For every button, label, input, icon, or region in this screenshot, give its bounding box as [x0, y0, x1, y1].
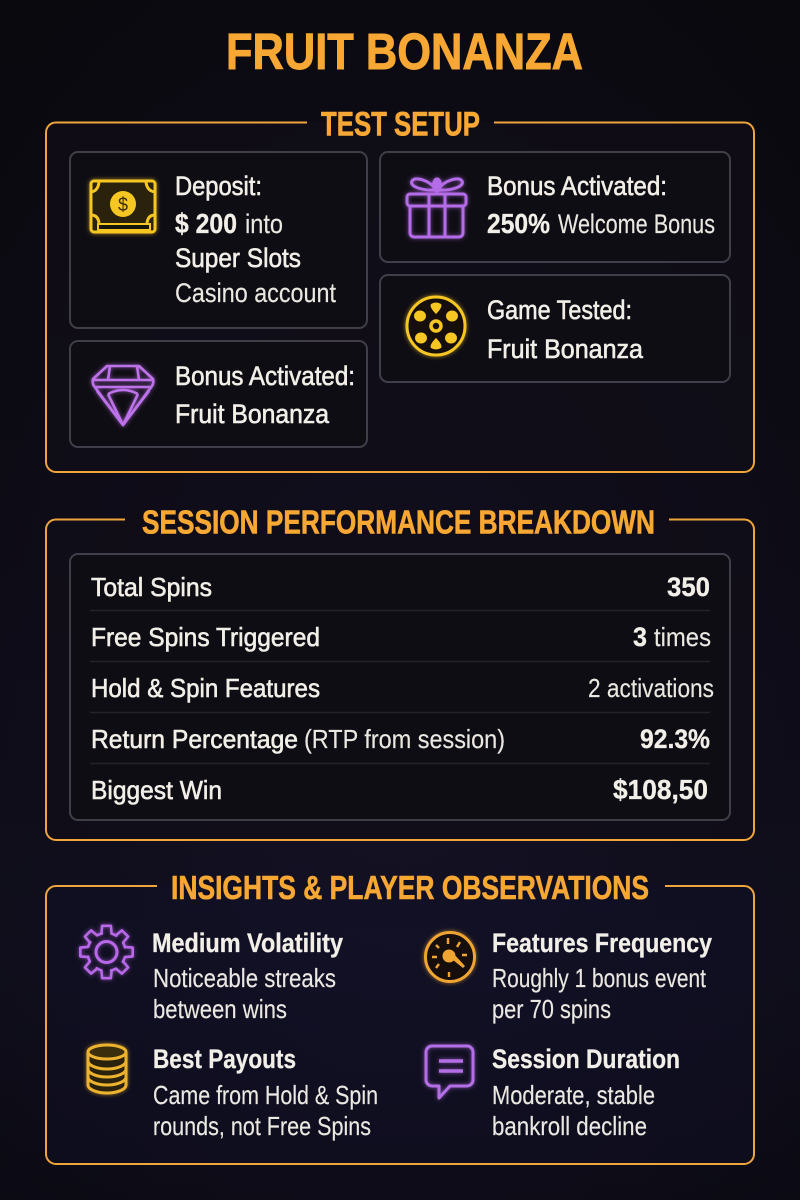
text: features frequency [492, 928, 712, 1024]
icon: speech bubble [426, 1046, 473, 1098]
text: session duration: bankroll decline [492, 1111, 647, 1141]
text: welcome bonus: Welcome Bonus [558, 209, 715, 239]
icon: banknote [91, 181, 155, 232]
row: hold and spin features: Hold & Spin Features [91, 673, 320, 703]
text: deposit [175, 171, 336, 308]
text: welcome bonus [487, 171, 715, 239]
icon: banknote: $ [118, 195, 128, 216]
card: game tested [380, 275, 730, 382]
text: medium volatility: Noticeable streaks [153, 963, 336, 993]
row: biggest win [91, 774, 708, 805]
row: return percentage: (RTP from session) [304, 724, 505, 754]
item: medium volatility [80, 926, 343, 1024]
text: bonus activated: Bonus Activated: [175, 361, 355, 391]
table: session stats [70, 554, 730, 820]
text: session duration: Session Duration [492, 1044, 680, 1074]
text: game tested: Fruit Bonanza [487, 334, 644, 364]
item: best payouts [88, 1044, 378, 1141]
row: biggest win: $108,50 [613, 774, 708, 805]
text: features frequency: Features Frequency [492, 928, 712, 958]
icon: coin stack [88, 1045, 126, 1093]
text: session duration [492, 1044, 680, 1141]
text: deposit: Deposit: [175, 171, 262, 201]
card: welcome bonus [380, 152, 730, 262]
text: best payouts: Came from Hold & Spin [153, 1080, 378, 1110]
text: features frequency: Roughly 1 bonus event [492, 963, 707, 993]
heading: session performance breakdown: SESSION PERFORMANCE BREAKDOWN [142, 504, 655, 540]
icon: wheel [407, 297, 465, 355]
text: best payouts [153, 1044, 378, 1141]
item: features frequency [426, 928, 712, 1024]
title: FRUIT BONANZA [226, 23, 583, 80]
card: bonus activated, fruit bonanza [70, 341, 367, 447]
card: deposit [70, 152, 367, 328]
text: deposit: $ 200 [175, 208, 237, 239]
panel: session performance breakdown [46, 504, 754, 840]
row: total spins: 350 [667, 572, 710, 602]
row: free spins triggered: Free Spins Triggered [91, 622, 320, 652]
row: hold and spin features [91, 673, 714, 703]
row: free spins triggered: times [654, 622, 711, 652]
heading: insights and player observations: INSIGHTS & PLAYER OBSERVATIONS [171, 869, 649, 906]
text: medium volatility: Medium Volatility [152, 928, 343, 958]
icon: gauge [426, 932, 474, 982]
panel: test setup [46, 106, 754, 472]
row: hold and spin features: 2 activations [588, 673, 714, 703]
icon: diamond [93, 366, 153, 425]
text: best payouts: Best Payouts [153, 1044, 296, 1074]
text: game tested: Game Tested: [487, 295, 632, 325]
text: bonus activated: Fruit Bonanza [175, 399, 330, 429]
text: bonus activated [175, 361, 355, 429]
text: features frequency: per 70 spins [492, 994, 611, 1024]
panel: insights and player observations [46, 869, 754, 1164]
text: medium volatility: between wins [153, 994, 287, 1024]
text: deposit: into [245, 209, 283, 239]
text: best payouts: rounds, not Free Spins [153, 1111, 371, 1141]
row: total spins: Total Spins [91, 572, 212, 602]
text: deposit: Casino account [175, 278, 336, 308]
row: return percentage [91, 724, 710, 754]
row: return percentage: 92.3% [640, 724, 710, 754]
text: welcome bonus: Bonus Activated: [487, 171, 667, 201]
row: return percentage: Return Percentage [91, 724, 298, 754]
icon: gear [80, 926, 133, 978]
text: deposit: Super Slots [175, 243, 301, 273]
icon: gift [407, 179, 466, 237]
text: game tested [487, 295, 644, 364]
text: medium volatility [152, 928, 343, 1024]
heading: test setup: TEST SETUP [321, 106, 480, 144]
text: welcome bonus: 250% [487, 208, 550, 239]
row: biggest win: Biggest Win [91, 775, 222, 805]
text: session duration: Moderate, stable [492, 1080, 655, 1110]
row: total spins [91, 572, 710, 602]
row: free spins triggered: 3 [633, 622, 647, 652]
row: free spins triggered [91, 622, 711, 652]
item: session duration [426, 1044, 680, 1141]
